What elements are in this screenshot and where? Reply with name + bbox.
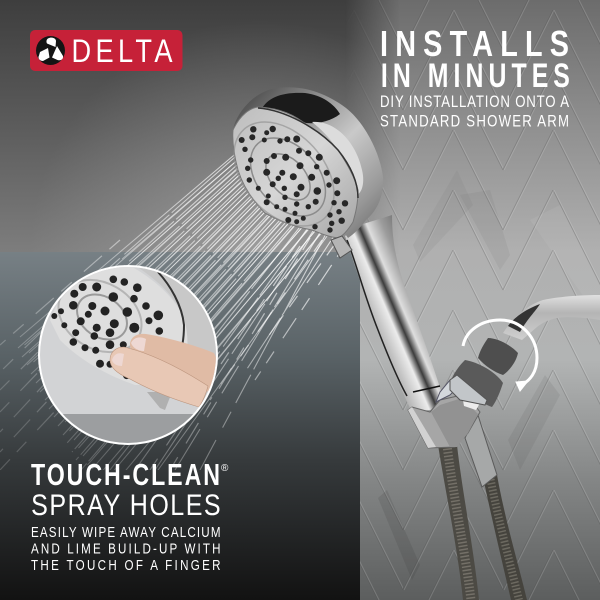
logo: emblem xyxy=(36,36,65,65)
inset: dark rim line xyxy=(157,272,185,343)
inset: upper finger xyxy=(130,334,217,392)
connector: lower nut xyxy=(452,360,503,407)
logo: red badge xyxy=(30,30,182,71)
inset: fingernails xyxy=(112,337,146,366)
text: touch-clean description: AND LIME BUILD-UP WITH xyxy=(31,540,221,557)
text: touch-clean description xyxy=(31,524,221,573)
heading: touch-clean spray holes xyxy=(31,457,229,521)
heading: touch-clean spray holes: TOUCH-CLEAN xyxy=(31,457,220,492)
inset circle: finger touching spray holes xyxy=(38,265,218,445)
head: bright dome xyxy=(312,122,363,194)
background: herringbone tile wall xyxy=(352,0,600,600)
inset: lower band xyxy=(63,414,193,443)
inset: spray face xyxy=(50,266,187,385)
head: rim line xyxy=(258,108,358,198)
head: dark reflection xyxy=(261,93,340,123)
inset: backdrop xyxy=(40,267,216,417)
hose right xyxy=(483,475,527,600)
rear hose holder xyxy=(465,412,497,487)
text: installation subhead: DIY INSTALLATION ONTO A xyxy=(380,93,569,111)
shower arm xyxy=(503,295,600,340)
hose left coil texture xyxy=(447,445,471,600)
handle of hand shower xyxy=(345,215,446,412)
heading: installs in minutes: IN MINUTES xyxy=(381,57,570,95)
text: installation subhead: STANDARD SHOWER ARM xyxy=(380,112,569,131)
inset: lower finger xyxy=(110,347,208,407)
inset: selector tab xyxy=(147,392,172,410)
inset: rings xyxy=(58,278,142,354)
background: lower wall xyxy=(0,252,360,600)
head: chrome back shell xyxy=(233,87,383,238)
mounting bracket xyxy=(408,380,480,448)
heading: touch-clean spray holes: SPRAY HOLES xyxy=(31,488,221,521)
arm: dark reflection xyxy=(508,304,540,332)
heading: installs in minutes xyxy=(380,23,570,95)
head: spray holes xyxy=(239,126,348,233)
inset: spray holes xyxy=(51,276,163,379)
hose left xyxy=(438,445,479,600)
head: selector tab xyxy=(331,236,352,258)
inset: chrome rim xyxy=(138,268,216,404)
shower head xyxy=(214,87,383,258)
heading: touch-clean spray holes: ® xyxy=(221,463,229,474)
heading: installs in minutes: INSTALLS xyxy=(380,23,569,64)
background: upper wall xyxy=(0,0,600,255)
text: touch-clean description: THE TOUCH OF A FINGER xyxy=(31,557,221,573)
head: concentric rings xyxy=(214,103,354,245)
connector: upper nut xyxy=(478,338,518,375)
text: installation subhead xyxy=(380,93,569,131)
text: touch-clean description: EASILY WIPE AWAY CALCIUM xyxy=(31,524,221,540)
hose right coil texture xyxy=(490,476,519,600)
connector: chrome collar xyxy=(450,375,487,405)
logo: wordmark: DELTA xyxy=(71,34,173,70)
head: spray face xyxy=(233,107,358,238)
logo: Delta xyxy=(30,30,182,71)
swivel connector xyxy=(450,338,518,407)
water spray xyxy=(0,154,338,470)
rotation arrow xyxy=(463,320,537,391)
